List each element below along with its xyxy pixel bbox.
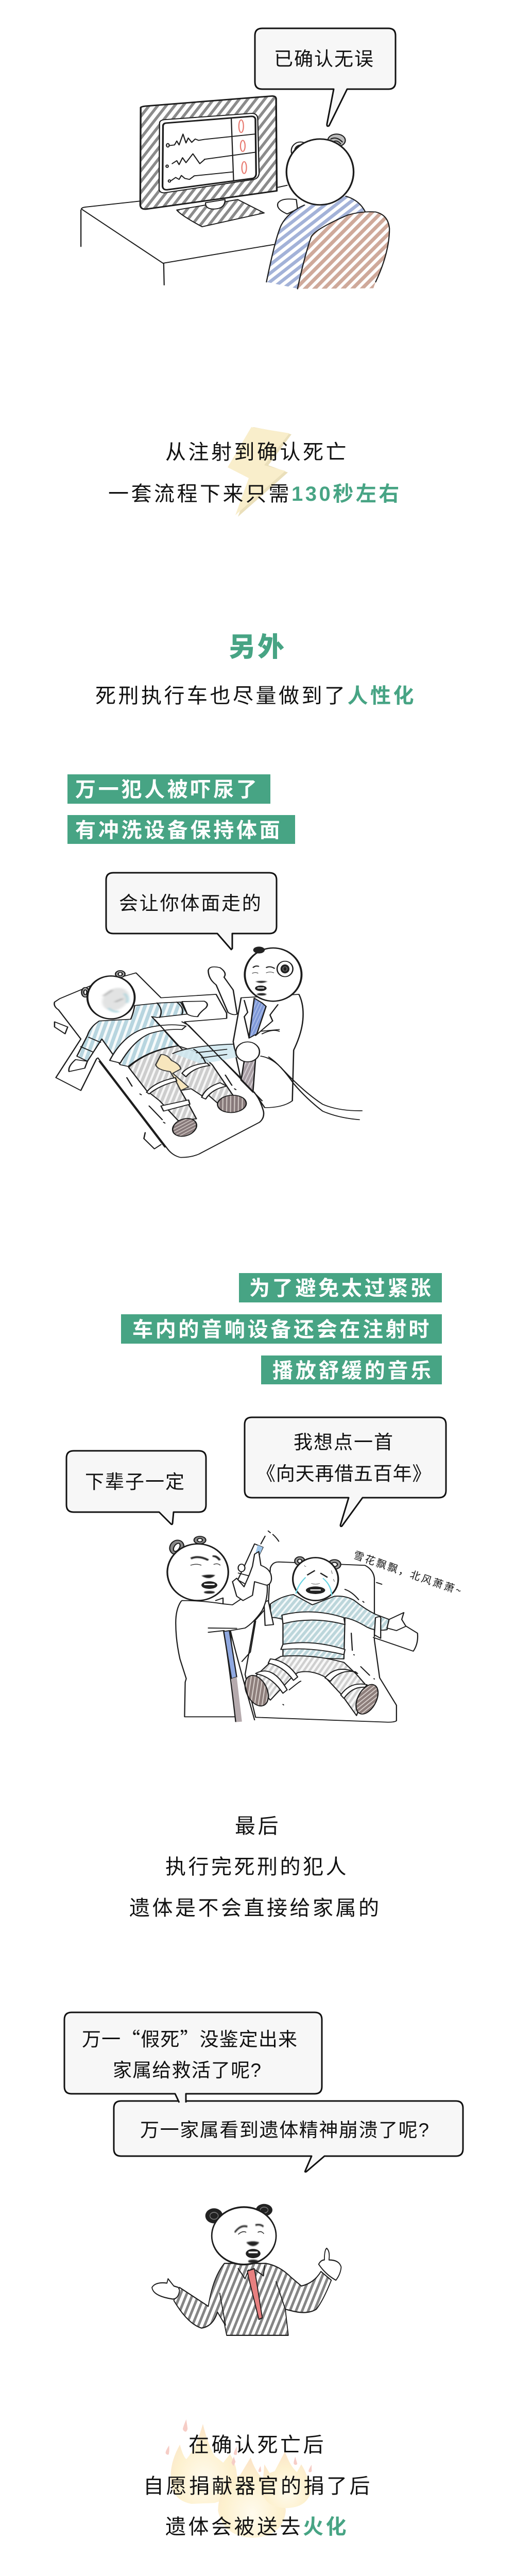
prisoner ears	[81, 971, 125, 997]
bubble text: 会让你体面走的	[119, 893, 263, 914]
crying face	[296, 1565, 334, 1596]
tag: music line 1: 为了避免太过紧张	[249, 1277, 434, 1300]
flame droplets	[166, 2419, 312, 2472]
speech bubble: next life	[66, 1451, 206, 1524]
text: cremation	[143, 2434, 372, 2538]
doctor tie	[249, 998, 266, 1038]
hand	[278, 199, 298, 214]
illustration: injection with song	[167, 1531, 418, 1722]
table edge line	[99, 1019, 262, 1147]
doctor face	[252, 966, 274, 995]
table foot blocks	[55, 1022, 161, 1149]
monitor stand	[177, 199, 264, 227]
tag: urine line 1: 万一犯人被吓尿了	[75, 778, 260, 801]
chair outline	[298, 212, 389, 289]
bubble text: 已确认无误	[274, 48, 374, 70]
prisoner shirt	[270, 1595, 389, 1659]
speech bubble: fake death	[64, 2012, 322, 2103]
illustration: hosing the prisoner	[54, 946, 362, 1158]
leg straps	[255, 1659, 367, 1699]
shoes	[241, 1673, 383, 1717]
prisoner pointing hand	[182, 1001, 208, 1016]
panda ear left	[291, 142, 310, 160]
line 2: 自愿捐献器官的捐了后	[143, 2475, 372, 2498]
bubble line 1: 我想点一首	[294, 1432, 394, 1453]
illustration: panda at monitor	[81, 28, 396, 289]
syringe	[238, 1531, 279, 1585]
speech bubble: song request	[245, 1417, 446, 1527]
waist strap	[281, 1642, 345, 1655]
desk	[81, 185, 287, 285]
urine stain	[156, 1055, 188, 1091]
text: 130 seconds	[108, 441, 402, 505]
right wrist strap	[374, 1617, 381, 1638]
text: body not returned: 最后	[235, 1815, 281, 1838]
text: humanised: 死刑执行车也尽量做到了人性化	[95, 685, 416, 707]
spray lines	[173, 1044, 233, 1063]
shirt outline	[266, 196, 365, 282]
shoes	[168, 1093, 250, 1139]
doctor face	[191, 1556, 220, 1594]
doctor head	[167, 1544, 228, 1601]
bubble line 1: 万一“假死”没鉴定出来	[82, 2024, 298, 2052]
prisoner blurred face	[97, 986, 133, 1013]
doctor body	[233, 994, 303, 1108]
middle flame	[218, 2458, 286, 2538]
speech bubble: confirmed	[255, 28, 396, 126]
doctor tie	[224, 1631, 237, 1679]
flames decoration	[166, 2419, 312, 2538]
prisoner head	[293, 1557, 338, 1601]
line 2: 执行完死刑的犯人	[165, 1856, 349, 1878]
vital sign waveforms	[166, 118, 255, 182]
prisoner pants	[129, 1046, 233, 1121]
chair back	[245, 1562, 397, 1722]
doctor tie lower	[231, 1677, 242, 1722]
speech bubble: family panic	[114, 2101, 463, 2172]
left hand	[152, 2279, 180, 2299]
doctor head	[245, 948, 302, 1001]
chest strap	[282, 1612, 345, 1624]
red zero readouts	[239, 120, 247, 174]
panda head	[286, 139, 354, 205]
text: 130 seconds: 从注射到确认死亡	[165, 441, 349, 464]
prisoner ears	[295, 1557, 341, 1569]
table marks	[127, 1075, 236, 1123]
chest strap arch	[110, 1025, 186, 1063]
leg straps	[146, 1063, 227, 1111]
song lyric text: 雪花飘飘，北风萧萧~	[352, 1547, 465, 1598]
suit lines	[220, 2266, 285, 2325]
bubble line 2: 家属给救活了呢?	[113, 2060, 262, 2081]
screen inner border	[163, 116, 256, 190]
text: cremation: 在确认死亡后	[188, 2434, 326, 2456]
doctor eye ring	[277, 961, 293, 977]
bubble line 2: 《向天再借五百年》	[256, 1463, 432, 1484]
tag: music line 3: 播放舒缓的音乐	[272, 1360, 434, 1382]
bubble text: 下辈子一定	[85, 1471, 185, 1493]
ears	[205, 2204, 272, 2224]
heading: 另外: 另外	[229, 633, 286, 663]
chair marks	[283, 1583, 382, 1705]
face	[235, 2225, 264, 2263]
doctor ears	[168, 1536, 206, 1556]
tag: music line 2: 车内的音响设备还会在注射时	[132, 1318, 432, 1341]
prisoner lower hand	[69, 1060, 88, 1072]
tag: urine line 2: 有冲洗设备保持体面	[75, 819, 282, 842]
left flame	[171, 2424, 237, 2504]
tie	[247, 2268, 262, 2319]
prisoner head	[88, 976, 135, 1019]
coat details	[209, 1598, 255, 1662]
line 3: 遗体会被送去火化	[165, 2516, 349, 2538]
lightning bolt decoration	[228, 427, 291, 517]
coat long line	[224, 1631, 254, 1722]
duration line: 一套流程下来只需130秒左右	[108, 483, 402, 505]
line 3: 遗体是不会直接给家属的	[129, 1897, 381, 1920]
prisoner pointing hand	[387, 1613, 406, 1631]
shirt	[266, 196, 365, 289]
hose	[261, 1056, 362, 1120]
text: body not returned	[129, 1815, 381, 1920]
prisoner shirt	[77, 1002, 187, 1066]
coat lapels	[244, 1001, 279, 1037]
monitor frame	[140, 96, 277, 209]
chair back	[298, 212, 389, 289]
doctor bun ear	[253, 946, 265, 954]
water spray	[174, 1043, 237, 1063]
monitor screen	[159, 113, 259, 193]
prisoner pants	[255, 1656, 367, 1716]
speech bubble: dignified	[106, 873, 277, 950]
doctor leg	[241, 1059, 255, 1092]
head	[212, 2207, 276, 2264]
raised arm and hand	[208, 967, 237, 1014]
sleeve cuffs	[81, 1002, 183, 1052]
monitor neck	[205, 199, 225, 209]
left wrist strap	[264, 1601, 273, 1625]
panda ear right	[328, 134, 345, 147]
doctor hand	[236, 1042, 260, 1062]
drawing: desk, monitor and seated panda	[81, 96, 389, 289]
right armrest	[373, 1625, 418, 1651]
right hand	[319, 2248, 341, 2280]
right flame	[263, 2451, 311, 2508]
table outline	[54, 973, 264, 1158]
doctor body	[176, 1582, 267, 1717]
bubble text: 万一家属看到遗体精神崩溃了呢?	[140, 2120, 430, 2141]
suit	[174, 2263, 331, 2335]
doctor hand	[232, 1552, 271, 1601]
illustration: shrugging panda in suit	[152, 2204, 341, 2335]
